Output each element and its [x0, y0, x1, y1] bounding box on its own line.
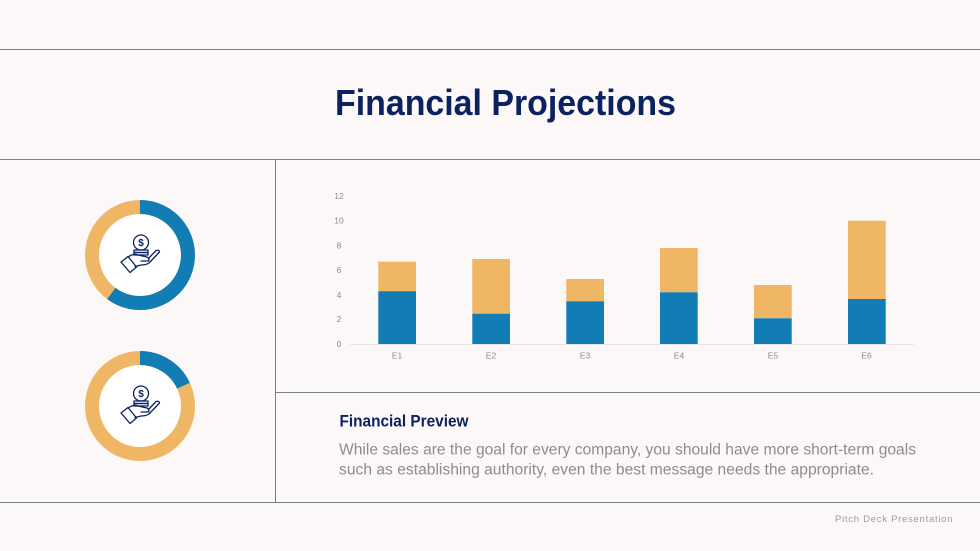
title: Financial Projections [335, 82, 676, 123]
x axis labels: E5 [768, 350, 778, 360]
icon: hand holding coin: $ [138, 238, 144, 249]
donut chart 2 with icon [92, 358, 188, 454]
bar E5 [754, 285, 792, 344]
y axis labels: 2 [337, 314, 342, 324]
heading: financial preview: Financial Preview [340, 412, 469, 430]
body text: such as establishing authority, even the best message needs the appropriate. [339, 462, 874, 478]
bar E3 [566, 279, 604, 344]
stacked bar chart [334, 191, 914, 360]
donut chart 1 with icon [92, 207, 188, 303]
x axis labels: E2 [486, 350, 496, 360]
y axis labels: 4 [337, 290, 342, 300]
bar E2 [472, 259, 510, 344]
bar E1 [378, 262, 416, 344]
y axis labels: 6 [337, 265, 342, 275]
icon: hand holding coin: $ [138, 389, 144, 400]
body text: While sales are the goal for every company, you should have more short-term goals [339, 442, 916, 458]
x axis labels: E4 [674, 350, 684, 360]
y axis labels: 10 [334, 216, 344, 226]
body text [339, 442, 916, 478]
y axis labels: 8 [337, 240, 342, 250]
bar E4 [660, 248, 698, 344]
y axis labels [334, 191, 344, 349]
x axis labels: E6 [861, 350, 872, 360]
x axis labels: E3 [580, 350, 590, 360]
footer label: Pitch Deck Presentation [835, 514, 952, 525]
y axis labels: 0 [337, 339, 342, 349]
y axis labels: 12 [334, 191, 344, 201]
x axis labels [392, 350, 872, 360]
bar E6 [848, 221, 886, 344]
x axis labels: E1 [392, 350, 402, 360]
